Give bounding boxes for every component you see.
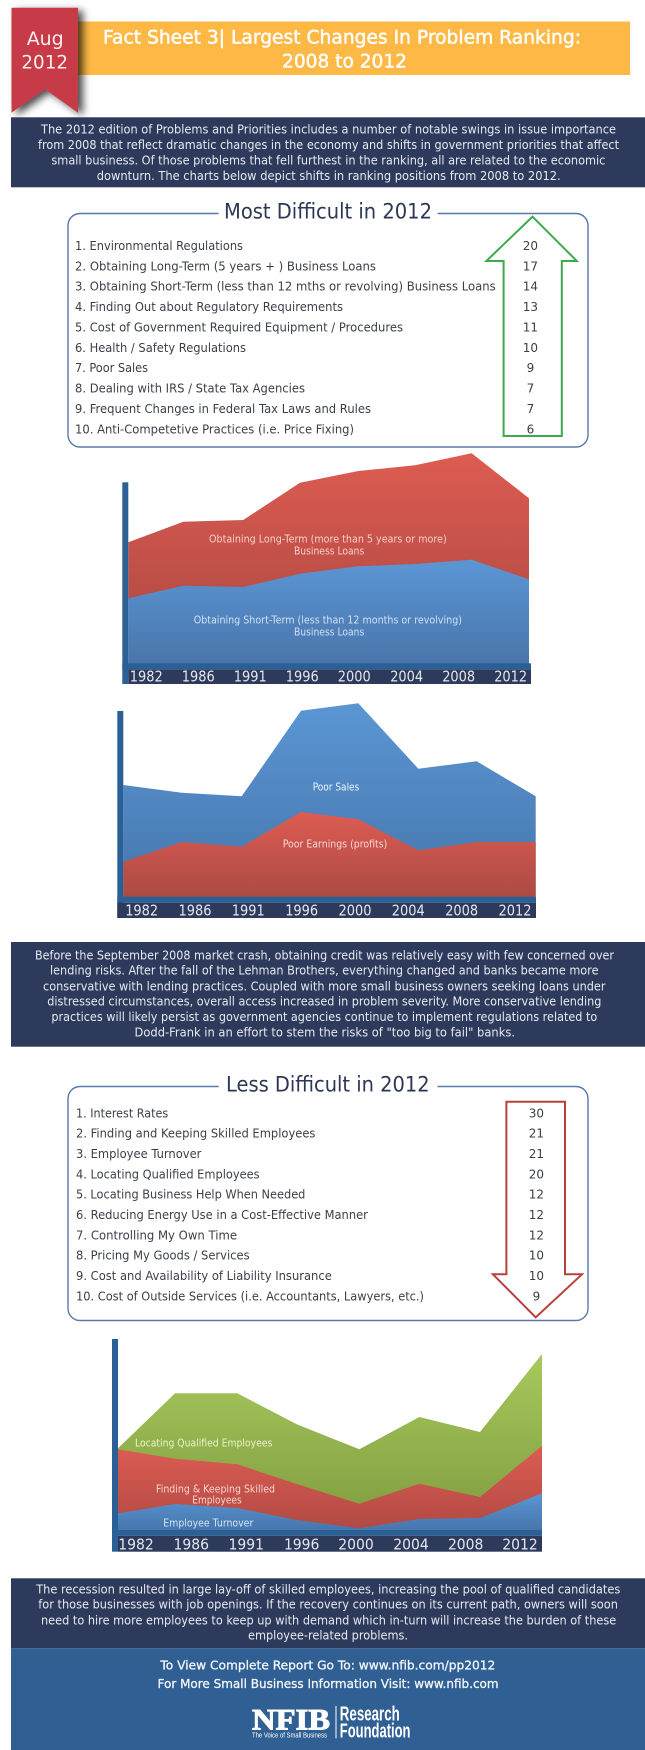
ranking list: 8. Pricing My Goods / Services bbox=[76, 1249, 250, 1263]
ranking list: 1. Environmental Regulations bbox=[75, 239, 243, 253]
ranking list: 9. Cost and Availability of Liability Insurance bbox=[76, 1269, 332, 1283]
date ribbon: Aug bbox=[27, 28, 64, 50]
chart: business loans area chart: Obtaining Long-Term (more than 5 years or more) bbox=[209, 534, 447, 546]
chart: employee problems area chart: 1982 bbox=[118, 1535, 154, 1553]
chart: poor sales and earnings area chart bbox=[117, 703, 536, 920]
chart: poor sales and earnings area chart: 2008 bbox=[445, 902, 478, 920]
ranking list: 12 bbox=[529, 1228, 544, 1242]
ranking list: 4. Locating Qualified Employees bbox=[76, 1167, 260, 1181]
recession text panel: for those businesses with job openings. If the recovery continues on its current path, owners will soon bbox=[38, 1598, 618, 1612]
panel: less difficult in 2012 bbox=[68, 1073, 588, 1320]
footer panel bbox=[11, 1648, 645, 1750]
logo: NFIB Research Foundation: Foundation bbox=[340, 1720, 410, 1742]
chart: employee problems area chart: 2012 bbox=[502, 1535, 538, 1553]
title banner: 2008 to 2012 bbox=[282, 50, 407, 72]
chart: business loans area chart: 1982 bbox=[130, 668, 163, 686]
ranking list bbox=[75, 239, 538, 436]
chart: employee problems area chart: 2000 bbox=[338, 1535, 374, 1553]
chart: poor sales and earnings area chart: 1996 bbox=[285, 902, 318, 920]
chart: employee problems area chart: 1996 bbox=[284, 1535, 319, 1553]
chart: business loans area chart: 1996 bbox=[286, 668, 319, 686]
ranking list: 10. Cost of Outside Services (i.e. Accountants, Lawyers, etc.) bbox=[76, 1289, 424, 1303]
ranking list: 6 bbox=[527, 422, 534, 436]
logo: NFIB Research Foundation: NFIB bbox=[252, 1704, 330, 1736]
ranking list: 3. Obtaining Short-Term (less than 12 mths or revolving) Business Loans bbox=[75, 280, 496, 294]
chart: business loans area chart: Obtaining Short-Term (less than 12 months or revolving) bbox=[194, 615, 462, 627]
ranking list: 14 bbox=[523, 280, 538, 294]
ranking list: 21 bbox=[529, 1147, 544, 1161]
logo: NFIB Research Foundation: Research bbox=[340, 1704, 400, 1726]
chart: employee problems area chart bbox=[112, 1339, 542, 1553]
ranking list: 6. Reducing Energy Use in a Cost-Effective Manner bbox=[76, 1208, 368, 1222]
ranking list: 7 bbox=[527, 402, 534, 416]
chart: employee problems area chart: 2008 bbox=[448, 1535, 483, 1553]
ranking list: 11 bbox=[523, 320, 538, 334]
ranking list: 5. Cost of Government Required Equipment / Procedures bbox=[75, 320, 403, 334]
chart: business loans area chart: Business Loans bbox=[294, 545, 364, 557]
chart: employee problems area chart: Locating Qualified Employees bbox=[135, 1437, 272, 1449]
intro text panel bbox=[11, 117, 645, 187]
ranking list: 9 bbox=[527, 361, 534, 375]
ranking list: 20 bbox=[529, 1167, 544, 1181]
ranking list: 6. Health / Safety Regulations bbox=[75, 341, 246, 355]
ranking list: 30 bbox=[529, 1106, 544, 1120]
ranking list: 1. Interest Rates bbox=[76, 1106, 168, 1120]
ranking list: 3. Employee Turnover bbox=[76, 1147, 201, 1161]
ranking list: 12 bbox=[529, 1208, 544, 1222]
date ribbon: 2012 bbox=[21, 51, 68, 73]
chart: business loans area chart: 2012 bbox=[494, 668, 527, 686]
chart: poor sales and earnings area chart: 2012 bbox=[498, 902, 532, 920]
chart: business loans area chart: 2000 bbox=[338, 668, 371, 686]
chart: poor sales and earnings area chart: Poor Earnings (profits) bbox=[283, 838, 387, 850]
recession text panel: The recession resulted in large lay-off of skilled employees, increasing the pool of qualified candidates bbox=[35, 1582, 620, 1596]
ranking list: 7. Poor Sales bbox=[75, 361, 148, 375]
credit explanation text panel: practices will likely persist as government agencies continue to implement regulations related to bbox=[51, 1010, 597, 1024]
ranking list bbox=[76, 1106, 544, 1303]
credit explanation text panel: Dodd-Frank in an effort to stem the risks of "too big to fail" banks. bbox=[134, 1025, 515, 1039]
credit explanation text panel: conservative with lending practices. Coupled with more small business owners seeking loans under bbox=[43, 979, 606, 993]
intro text panel: downturn. The charts below depict shifts in ranking positions from 2008 to 2012. bbox=[97, 169, 561, 183]
logo: NFIB Research Foundation bbox=[252, 1704, 410, 1742]
chart: business loans area chart: 1991 bbox=[234, 668, 267, 686]
heading: most difficult: Most Difficult in 2012 bbox=[224, 199, 432, 223]
title banner bbox=[78, 22, 630, 75]
ranking list: 21 bbox=[529, 1127, 544, 1141]
ranking list: 4. Finding Out about Regulatory Requirements bbox=[75, 300, 343, 314]
chart: poor sales and earnings area chart: 1991 bbox=[232, 902, 265, 920]
ranking list: 7. Controlling My Own Time bbox=[76, 1228, 237, 1242]
intro text panel: from 2008 that reflect dramatic changes in the economy and shifts in government priorities that affect bbox=[38, 138, 619, 152]
ranking list: 7 bbox=[527, 382, 534, 396]
chart: employee problems area chart: 1986 bbox=[174, 1535, 209, 1553]
website link: For More Small Business Information Visit: www.nfib.com bbox=[158, 1677, 499, 1691]
chart: business loans area chart bbox=[122, 453, 531, 686]
ranking list: 10 bbox=[529, 1269, 544, 1283]
ranking list: 5. Locating Business Help When Needed bbox=[76, 1188, 305, 1202]
ranking list: 20 bbox=[523, 239, 538, 253]
ranking list: 13 bbox=[523, 300, 538, 314]
recession text panel: need to hire more employees to keep up with demand which in-turn will increase the burden of these bbox=[41, 1613, 616, 1627]
chart: poor sales and earnings area chart: 2000 bbox=[338, 902, 372, 920]
credit explanation text panel: Before the September 2008 market crash, obtaining credit was relatively easy with few concerned over bbox=[35, 948, 614, 962]
intro text panel: The 2012 edition of Problems and Priorities includes a number of notable swings in issue importance bbox=[40, 122, 616, 136]
chart: poor sales and earnings area chart: Poor Sales bbox=[313, 782, 359, 794]
chart: employee problems area chart: Finding & Keeping Skilled bbox=[156, 1483, 275, 1495]
ranking list: 9 bbox=[533, 1289, 540, 1303]
ranking list: 10 bbox=[523, 341, 538, 355]
logo: NFIB Research Foundation: The Voice of Small Business bbox=[252, 1732, 327, 1739]
chart: employee problems area chart: Employees bbox=[192, 1495, 242, 1507]
chart: business loans area chart: 1986 bbox=[182, 668, 215, 686]
ranking list: 8. Dealing with IRS / State Tax Agencies bbox=[75, 382, 305, 396]
heading: less difficult: Less Difficult in 2012 bbox=[226, 1073, 430, 1097]
ranking list: 17 bbox=[523, 259, 538, 273]
credit explanation text panel: distressed circumstances, overall access increased in problem severity. More conservative lending bbox=[47, 995, 601, 1009]
chart: poor sales and earnings area chart: 1986 bbox=[178, 902, 212, 920]
panel: most difficult in 2012 bbox=[68, 199, 588, 447]
title banner: Fact Sheet 3| Largest Changes In Problem Ranking: bbox=[103, 26, 581, 48]
ranking list: 10 bbox=[529, 1249, 544, 1263]
ranking list: 2. Obtaining Long-Term (5 years + ) Business Loans bbox=[75, 259, 376, 273]
report link: To View Complete Report Go To: www.nfib.com/pp2012 bbox=[159, 1658, 495, 1672]
icon: green up arrow bbox=[486, 217, 577, 436]
chart: poor sales and earnings area chart: 1982 bbox=[125, 902, 158, 920]
chart: poor sales and earnings area chart: 2004 bbox=[392, 902, 425, 920]
intro text panel: small business. Of those problems that fell furthest in the ranking, all are related to the economic bbox=[51, 154, 605, 168]
recession text panel: employee-related problems. bbox=[248, 1629, 408, 1643]
chart: employee problems area chart: Employee Turnover bbox=[163, 1518, 254, 1530]
credit explanation text panel: lending risks. After the fall of the Lehman Brothers, everything changed and banks became more bbox=[50, 964, 598, 978]
recession text panel bbox=[11, 1578, 645, 1648]
credit explanation text panel bbox=[11, 942, 645, 1047]
ranking list: 10. Anti-Competetive Practices (i.e. Price Fixing) bbox=[75, 422, 354, 436]
chart: business loans area chart: 2008 bbox=[442, 668, 475, 686]
chart: business loans area chart: 2004 bbox=[390, 668, 423, 686]
ranking list: 9. Frequent Changes in Federal Tax Laws and Rules bbox=[75, 402, 371, 416]
chart: employee problems area chart: 2004 bbox=[393, 1535, 429, 1553]
icon: red down arrow bbox=[493, 1102, 582, 1317]
date ribbon bbox=[12, 8, 78, 113]
ranking list: 2. Finding and Keeping Skilled Employees bbox=[76, 1127, 315, 1141]
ranking list: 12 bbox=[529, 1188, 544, 1202]
chart: business loans area chart: Business Loans bbox=[294, 626, 364, 638]
chart: employee problems area chart: 1991 bbox=[229, 1535, 264, 1553]
